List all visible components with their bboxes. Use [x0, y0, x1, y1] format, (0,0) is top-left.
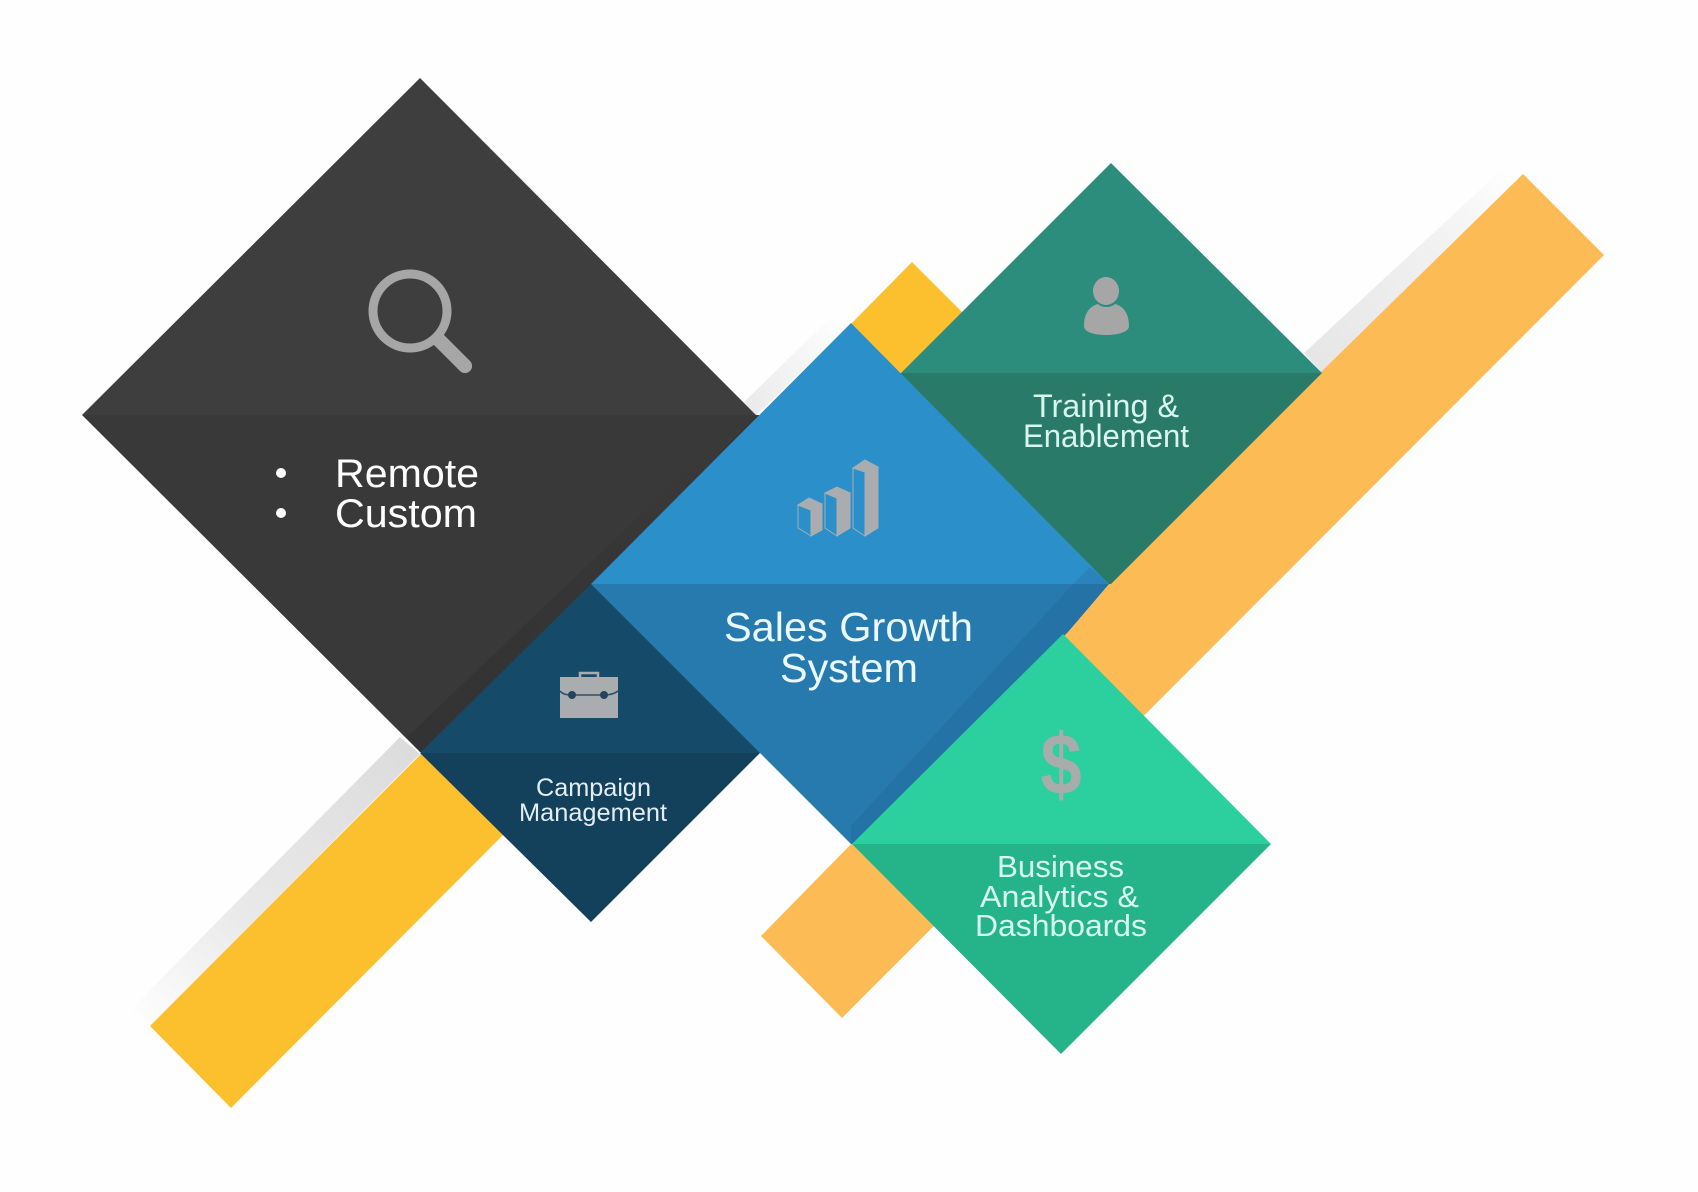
panel: campaign management (navy diamond) — [420, 584, 775, 922]
text: remote custom list: Remote — [335, 452, 479, 496]
panel: business analytics (green diamond) — [852, 634, 1271, 1054]
text: sales growth system: System — [780, 645, 918, 691]
icon: bar chart — [798, 460, 878, 536]
text: campaign management: Management — [519, 799, 667, 827]
shadow: upper orange bar — [1304, 160, 1523, 373]
text: remote custom list — [276, 452, 479, 536]
text: campaign management — [519, 774, 667, 827]
icon: magnifying glass — [373, 274, 472, 373]
bar: small yellow tab — [845, 262, 966, 378]
text: training and enablement: Enablement — [1023, 418, 1189, 454]
text: campaign management: Campaign — [536, 774, 651, 802]
panel: remote custom (dark diamond) — [82, 78, 775, 752]
icon: person — [1084, 277, 1129, 335]
text: business analytics and dashboards: Dashboards — [975, 908, 1147, 943]
shadow: blue diamond upper edge — [744, 310, 852, 415]
icon: briefcase — [560, 673, 618, 718]
text: business analytics and dashboards: Business — [997, 849, 1124, 884]
text: training and enablement — [1023, 388, 1189, 454]
icon: dollar sign: $ — [1040, 716, 1082, 812]
text: business analytics and dashboards: Analytics & — [980, 879, 1139, 914]
text: sales growth system: Sales Growth — [724, 604, 973, 650]
bar: lower yellow ribbon — [150, 745, 512, 1108]
text: training and enablement: Training & — [1033, 388, 1179, 424]
bar: long orange ribbon — [761, 174, 1604, 1018]
panel: sales growth system (blue diamond) — [591, 323, 1109, 844]
text: sales growth system — [724, 604, 973, 691]
text: remote custom list: Custom — [335, 492, 477, 536]
shadow: lower yellow bar — [130, 737, 420, 1026]
panel: training and enablement (teal diamond) — [885, 163, 1322, 584]
text: business analytics and dashboards — [975, 849, 1147, 943]
